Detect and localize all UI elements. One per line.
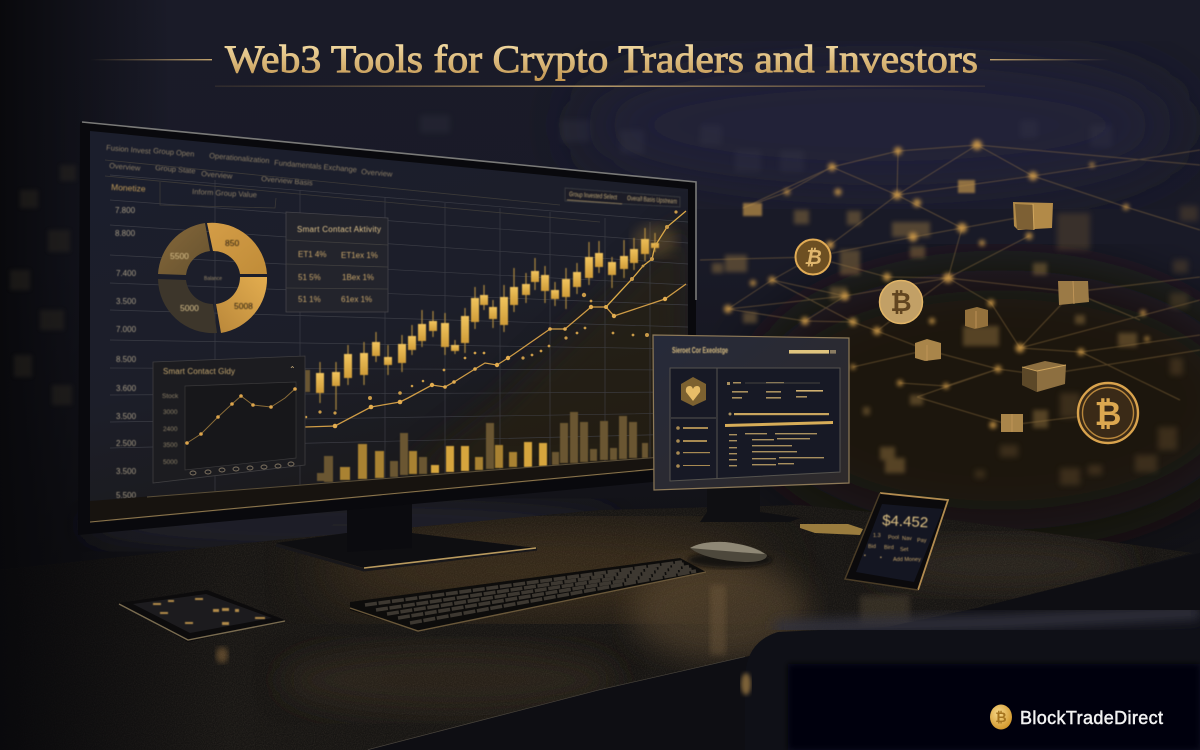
phone balance: $4.452 [882,512,929,531]
keyboard keys [365,562,696,623]
background navy glow [580,55,1180,195]
header menu text: Fusion Invest [106,143,152,156]
phone stats: Bid [868,544,876,550]
gold object on desk [800,524,863,535]
candlesticks [302,228,659,410]
cube [915,339,941,361]
y axis labels: 7.400 [116,269,137,278]
header table lines [105,160,600,222]
phone stats [864,533,927,563]
bitcoin coin medium: ₿ [890,287,912,317]
price points dotted [305,210,678,418]
phone stats: Pool [888,535,899,541]
y axis labels: 8.800 [115,229,136,238]
stand neck [347,495,412,552]
tab labels: Overall Basis Upstream [627,195,677,205]
main monitor [78,122,696,535]
y axis labels: 3.500 [116,412,137,421]
chair gold reflection [741,673,751,695]
section label: Monetize [111,182,146,194]
candle bodies [302,239,659,393]
phone stats: Pay [917,538,927,544]
smart contract line panel: 5000 [163,459,178,466]
desk texture [101,505,1189,750]
candle wicks [320,228,655,410]
tab labels [565,188,680,207]
smart contract line panel: 3500 [163,442,178,449]
header menu text: Fundamentals Exchange [274,158,357,174]
smart contract activity panel: ET1 4% [298,250,326,259]
header menu text: Operationalization [209,151,270,165]
desk [0,500,1200,750]
y axis labels: 2.500 [116,439,137,448]
smart contract line panel: Smart Contact Gldy [163,367,235,376]
donut chart [158,223,267,333]
tablet [119,590,285,642]
network nodes [724,140,1150,428]
icon: shield with heart [681,377,706,406]
chair top sheen [775,612,1200,628]
y axis labels: 7.000 [116,325,137,334]
title underline [215,86,985,87]
search bar [789,350,829,354]
chair inner dark [788,664,1200,750]
phone stats: Nav [902,536,912,542]
phone stats: Bird [884,545,894,551]
cube [965,307,988,329]
bitcoin coin medium [880,280,922,324]
title rule left [90,59,212,60]
bitcoin coin large [1078,383,1138,443]
cube [1013,202,1053,230]
y axis labels [115,206,137,500]
donut chart: 5000 [180,303,199,313]
y axis labels: 5.500 [116,491,137,500]
monitor screen [90,131,688,523]
back wall reflection [80,503,620,547]
header menu text: Group State [155,163,196,176]
header menu text: Overview [361,167,393,179]
donut chart: Balance [204,276,222,282]
second monitor stand [700,485,800,522]
rising gold line [606,211,686,307]
chart peak glow [633,224,677,256]
chart grid [110,175,688,505]
details text lines [727,382,829,466]
smart contract activity panel [286,212,388,312]
smart contract line panel: ⌃ [289,365,296,374]
cube [1001,414,1023,432]
screen inner bottom zone [90,458,653,523]
bitcoin coin small [796,240,830,274]
desk left vignette [0,554,164,750]
smart contract activity panel: ET1ex 1% [341,251,378,260]
header menu text: Overview [109,161,141,173]
title: Web3 Tools for Crypto Traders and Investors [225,38,978,81]
cube [1058,281,1089,305]
tab labels: Group Invested Select [569,191,617,201]
panel heading: Sieroet Cor Exeolstge [672,346,728,355]
icon: logo coin [990,704,1012,730]
cube [1022,361,1066,392]
blurred cubes [712,210,1137,473]
header menu text: Overview Basis [261,174,313,188]
pixel squares left [10,165,76,405]
chair silhouette [741,612,1200,750]
header menu text: Inform Group Value [192,187,257,199]
phone stats: ▪ [864,553,866,559]
y axis labels: 8.500 [116,355,137,364]
panel frame [670,368,840,481]
network lines [700,145,1200,425]
mouse [688,542,772,568]
y axis labels: 7.800 [115,206,136,215]
bitcoin coin large: ₿ [1095,395,1121,432]
donut chart: 5500 [170,251,189,261]
title rule right [990,59,1110,60]
icon: logo coin: ₿ [995,709,1007,725]
phone stats: Set [900,547,909,553]
smart contract line panel: 3000 [163,409,178,416]
background amber haze [750,270,1200,530]
under desk shadow [368,553,1200,750]
phone stats: 1.3 [873,533,881,539]
dim blurred cubes [975,206,1198,485]
desk reflection spots [216,647,228,663]
phone [845,493,948,590]
smart contract activity panel: 51 5% [298,273,321,282]
smart contract activity panel: Smart Contact Aktivity [297,225,381,234]
y axis labels: 3.500 [116,467,137,476]
smart contract line panel: 2400 [163,426,178,433]
second monitor [653,335,849,490]
brighter blurred cubes [743,180,975,216]
bezel top highlight [82,122,696,300]
smart contract line panel [153,356,305,483]
header menu text: Group Open [153,146,195,159]
gold highlight bar [725,421,833,427]
smart contract activity panel: 61ex 1% [341,295,372,304]
smart contract line panel: Stock [162,393,179,400]
volume bars [317,412,648,482]
phone stats: Add Money [893,557,921,563]
donut chart: 5008 [234,301,253,311]
blockchain network [700,140,1200,485]
stand base [276,533,536,568]
header menu text [106,143,393,199]
smart contract activity panel: 51 1% [298,295,321,304]
keyboard [350,558,706,631]
y axis labels: 3.500 [116,297,137,306]
smart contract activity panel: 1Bex 1% [342,273,374,282]
monitor stand [276,495,537,570]
donut chart: 850 [225,238,239,248]
left vignette [0,0,170,750]
bitcoin coin small: ₿ [804,247,822,269]
brand name: BlockTradeDirect [1020,708,1163,728]
tablet screen details [153,598,265,625]
desk warm light [310,525,770,615]
brand logo [990,704,1163,730]
y axis labels: 3.600 [116,384,137,393]
header menu text: Overview [201,169,233,181]
warm chart haze [438,229,688,456]
monitor bezel [78,122,696,535]
list items left [676,426,710,468]
price line solid [305,284,686,428]
phone stats: ▪ [880,555,882,561]
desk front edge [368,657,745,750]
pixel squares top [420,115,1112,172]
